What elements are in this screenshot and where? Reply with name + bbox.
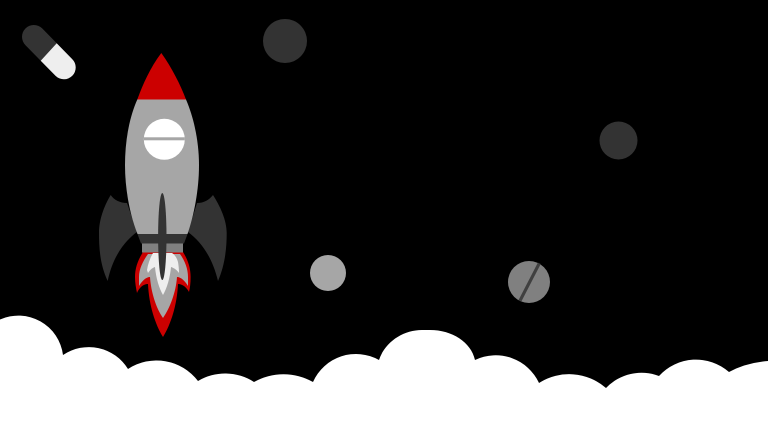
clouds — [0, 316, 768, 432]
planet: grey circle with slash — [508, 261, 550, 303]
rocket window — [144, 119, 185, 160]
rocket flame: red outer — [135, 252, 191, 337]
rocket centre fin — [158, 193, 166, 280]
rocket nozzle — [142, 244, 183, 252]
rocket left fin — [99, 195, 137, 281]
icon: capsule pill — [22, 25, 76, 79]
rocket flame: grey middle — [139, 254, 188, 318]
planet: light grey circle — [310, 255, 346, 291]
rocket body — [125, 100, 199, 234]
rocket right fin — [188, 195, 227, 281]
planet: dark right circle — [600, 122, 638, 160]
rocket dark band — [138, 234, 188, 244]
rocket — [99, 53, 227, 337]
rocket flame: white inner — [147, 253, 179, 295]
planet: dark top circle — [263, 19, 307, 63]
rocket nose cone — [137, 53, 186, 100]
